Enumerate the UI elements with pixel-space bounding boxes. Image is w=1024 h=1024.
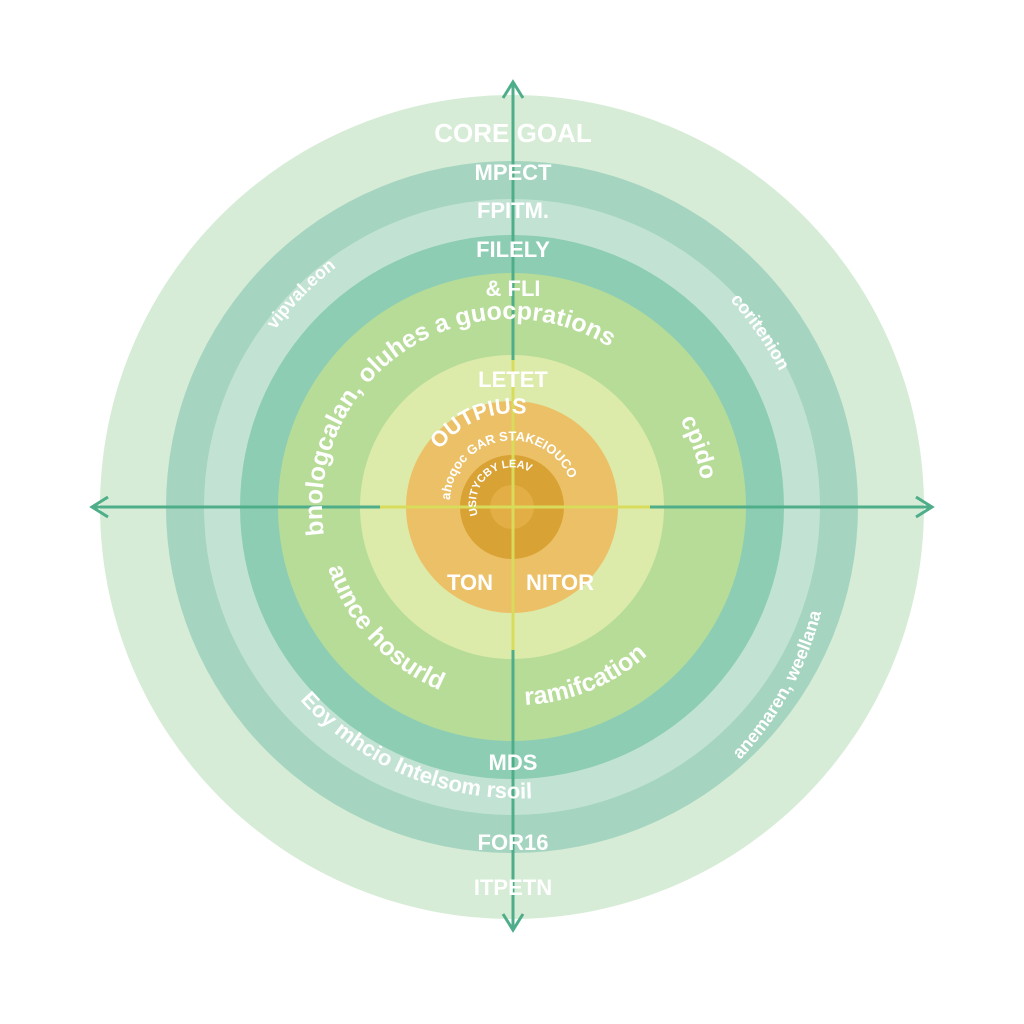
- ring labels: CORE GOAL: [434, 118, 592, 148]
- ring labels: & FLI: [486, 276, 540, 301]
- ring labels: TON: [447, 570, 493, 595]
- curved labels: Eoy mhcio Intelsom rsoil: [301, 690, 531, 799]
- axes arrows: [92, 82, 932, 930]
- curved labels: OUTPIUS: [432, 398, 526, 446]
- curved labels: bnologcalan, oluhes a guocprations: [305, 306, 614, 536]
- curved labels: ahoqoc GAR STAKEIOUCO: [442, 432, 576, 500]
- curved labels: coritenion: [732, 296, 787, 370]
- curved labels: anemaren, weellana: [734, 612, 821, 759]
- ring labels: ITPETN: [474, 875, 552, 900]
- ring labels: FILELY: [476, 237, 550, 262]
- curved labels: ramifcation: [526, 647, 646, 705]
- curved labels: vipval.eon: [268, 262, 336, 328]
- ring labels: NITOR: [526, 570, 594, 595]
- ring labels: FPITM.: [477, 198, 549, 223]
- ring labels: MPECT: [474, 160, 552, 185]
- curved labels: aunce hosurld: [328, 566, 446, 690]
- ring labels: [434, 118, 594, 900]
- curved labels: USITYCBY LEAV: [468, 460, 533, 516]
- curved labels: cpido: [682, 416, 714, 478]
- ring labels: MDS: [489, 750, 537, 775]
- concentric ring diagram: [100, 95, 924, 919]
- ring labels: FOR16: [478, 830, 548, 855]
- curved labels: [268, 262, 821, 799]
- ring labels: LETET: [478, 367, 548, 392]
